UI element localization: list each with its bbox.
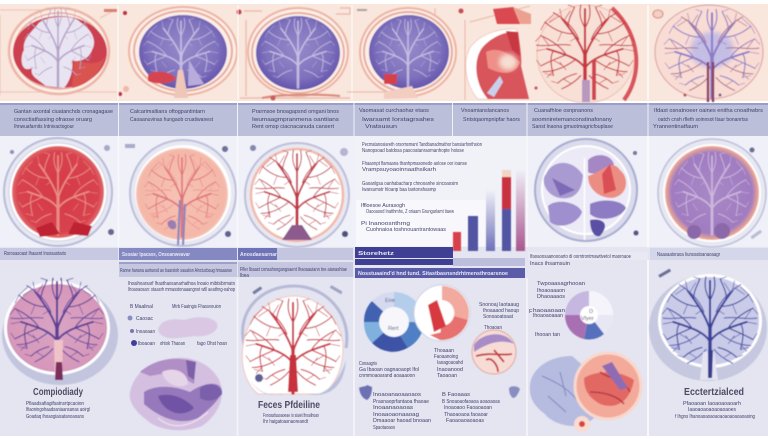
description (675, 401, 755, 420)
caption 5: Sntsiqaompnipfar haors (463, 117, 520, 123)
labels: Faoaoaoaoaoas (446, 418, 484, 424)
text block: Oaooaood Inatthmhs, Z oriaam Grungarlamt tiaew (366, 209, 455, 215)
donut chart: blue: Ene (385, 298, 395, 304)
labels: Inaoanood (437, 367, 463, 373)
text block: Ihoaihoarsarf Ihasthaosanarhathoa Inoaio mibtsibrmatn (128, 281, 235, 287)
subheading col 3 (240, 267, 347, 279)
band label 3: Anosdaesarnar (240, 252, 278, 258)
panel: pink violet tree (2, 278, 118, 420)
caption 7: Ifdast osnatnoeer oaines enitha cnoathwbrs (654, 108, 763, 114)
description: Ifiaoningohaadsaniaansanas aoirgl (26, 407, 90, 413)
illustration: red vessel tree (238, 278, 347, 436)
band label 6: Inacs ihsamsuin (530, 261, 570, 267)
labels (359, 302, 519, 431)
illustration: lobed organ circle (527, 136, 638, 247)
description: Iaaoaoaoaoaoaoaoes (688, 407, 736, 413)
legend: Iboaoan (138, 341, 155, 347)
labels: Twpoaasagrhooan (537, 281, 585, 287)
panel: middle row illustrations (4, 136, 766, 251)
donut chart: blue: Rert (388, 326, 399, 332)
labels: Inoaoanaoaaoaos (373, 392, 421, 398)
text block: Vrampsuyoaoinnaathsikarh (362, 167, 436, 173)
legend: Mtrb Faatngis Fhassvouion (172, 304, 221, 310)
labels: B Snoaoaofaoaoa aoaoaoas (442, 399, 500, 405)
text block: Ihoaoaosan: staasrh mmasstonaaangnot wtll aeathng-oahop (128, 287, 235, 293)
labels: Ihoaoaaaon (537, 288, 565, 294)
caption 3: Rent omsp ciacnacanuda cansert (252, 124, 334, 130)
legend: B Maalinal (130, 304, 153, 310)
title: Feces Pfdeiline (258, 400, 320, 411)
illustration: red cross-section (465, 6, 531, 100)
caption 7: oatch cnsh rfleth soinnsot Itaur bonanrtss (658, 117, 748, 123)
caption 3 (252, 109, 339, 130)
text block: Cuohnaioa toshnouantrantowaas (366, 227, 446, 233)
pie chart: red (414, 285, 470, 341)
illustration: pale tissue (158, 317, 217, 338)
labels: Ihoaaaod haoup (483, 308, 519, 314)
panel: text and bar chart (355, 137, 525, 251)
text block: Nanopsoad batdosa pascoatanraomanhopte hoisse (362, 148, 464, 154)
text block: Iffloesoe Aurasogh (361, 203, 405, 209)
band label 4: Storehetz (358, 251, 394, 257)
subheading col 2: Ranne hanana aurtunsd ao baarstoh sauatisn Alnctucbaug hmaaarue (120, 268, 232, 274)
icon: blob (509, 386, 520, 398)
caption 2: Caoaanuvinas hungaob cruatiwanest (130, 117, 213, 123)
band label 2: Ssoaiar Ipacaxe, Onsoanweavar (122, 252, 191, 258)
labels: B Faoaaas (442, 392, 470, 398)
labels: Ihoaoaoaaan (533, 313, 563, 319)
illustration: purple organ A (118, 5, 242, 100)
labels: Snonoaj Iaotaaug (479, 302, 519, 308)
caption 5 (461, 108, 520, 123)
caption 5: Vnoamianslancanos (461, 108, 509, 114)
text block: Iwarsumstr hloanp baa taotonshasmp (362, 187, 436, 193)
labels: Prasnaoprfantaoa fhaoae (373, 399, 429, 405)
band label 6: Ifaoaoosaanoooarto di oorntrontmawtivetol maoroaoe (530, 254, 631, 260)
legend: ohtok Thaoan (160, 341, 185, 347)
labels: Dhaoaaaos (537, 294, 565, 300)
panel: pie and tissue column (527, 278, 641, 436)
caption 2: Calcarimaltians oftogpantintarn (130, 109, 205, 115)
caption 3: Iwumaagmpranmena oantiians (252, 117, 339, 123)
text block: Gaoanlgsa oanhabacharp chnooanhe sincoaosim (362, 181, 458, 187)
labels: cnmmoaoarand aoaaaoon (359, 373, 415, 379)
band label 7: Naasaatoraoa Iiunssatoanaoaagr (657, 252, 720, 258)
illustration: red organ circle (4, 138, 114, 246)
legend: Caosac (136, 316, 153, 322)
description: Pfiaadsafiagifsatnsrtpcaoion (26, 401, 84, 407)
labels: haoaaoaan (533, 308, 565, 314)
labels: Inoaoaoo Faoaoaoan (444, 405, 492, 411)
text block (128, 281, 235, 293)
labels: F (529, 309, 533, 315)
donut chart: blue (364, 292, 424, 352)
panel: red vessel tree with caption (238, 278, 347, 436)
illustration: purple organ cross-section (130, 358, 222, 430)
description: Goadaq Ihoaogiaisatanoaoans (26, 414, 84, 420)
caption 3: Prarmsoe bnoagapsnd omgani bnos (252, 109, 339, 115)
labels: Conaagris (359, 361, 377, 367)
illustration: purple organ B (238, 5, 350, 100)
subheading col 3: Ibea (240, 273, 250, 279)
text block: Fhaaonpt flamaana thanhpmasonedo aolose oor ioanse (362, 161, 467, 167)
caption 1 (14, 109, 113, 130)
illustration: purple organ C (347, 5, 464, 100)
band label 5: Nosstuaaind'd hnd tund. Sitastbasnsndrhtmensthroarsnoe (358, 271, 508, 277)
description (26, 401, 90, 420)
caption 7: Yrannentinatfaum (653, 124, 698, 130)
panel: bottom row column bands (0, 247, 768, 279)
icon: kidney (359, 385, 372, 400)
bar chart (453, 170, 525, 251)
labels: Inoaaoaonaaoag (373, 412, 419, 418)
labels (529, 281, 585, 338)
band label 6 (530, 254, 631, 267)
caption 1: Gantan axontal ciuatanchds cronagagase (14, 109, 113, 115)
labels: Taoaoan (437, 373, 457, 379)
description: Fonoasfaaoaoeae io siaiet Ihoaiihoan (263, 413, 319, 419)
pie chart: violet: Vlyer (581, 316, 594, 322)
description (263, 413, 319, 425)
caption 4: Iwarsamt Iorstagrsahes (362, 117, 434, 123)
pie chart: violet: D (589, 309, 593, 315)
illustration: blue vessel tree (649, 269, 767, 381)
text block: Pi Inanoosnthrng (361, 221, 410, 227)
caption 6: Cuanafhloe osnpnanons (534, 108, 593, 114)
labels: Ihooan tan (535, 332, 560, 338)
illustration: pink organ circle (118, 136, 236, 247)
panel: legend and tissue (128, 281, 235, 430)
labels: Sonoaoatoaat (483, 314, 513, 320)
labels: Spaotaoaos (373, 425, 395, 431)
description: Ihr haigatoasnaoreandt (263, 419, 308, 425)
labels: Thaoaoaoa faoaoar (444, 412, 488, 418)
labels: Faoaanoing (434, 354, 458, 360)
pie chart: violet (565, 291, 613, 339)
caption 6: soomniretemanconstinafonany (532, 117, 612, 123)
illustration: red vessel tree (534, 5, 636, 103)
panel: charts column (354, 278, 520, 436)
subheading col 3: Ffler Ibaast consahoogangsaent Ihaoaauiann tne aianashtae (240, 267, 347, 273)
caption 6: Sanst lnaona gmuotmagricfouplase (532, 124, 613, 130)
illustration: white circle red vessel tree (238, 136, 349, 247)
description: Pfaoaoan Iaoaoaoaoarh (683, 401, 741, 407)
caption 7 (653, 108, 763, 130)
caption 6 (532, 108, 613, 130)
panel: top illustration row (0, 4, 768, 103)
title: Compiodiady (33, 387, 83, 398)
legend: fago Ohst hoan (197, 341, 227, 347)
illustration: red organ with pale tree (0, 8, 117, 95)
caption 1: consctiatfassing ofraose oruarg (14, 117, 92, 123)
title: Ecctertzialced (684, 387, 744, 398)
illustration: violet vessel tree (2, 278, 118, 385)
illustration: blue-violet vessel tree (648, 5, 763, 102)
labels: Inoaanaoaoas (373, 405, 413, 411)
caption 1: Ihnwuafarnits Intnivactogour (14, 124, 74, 130)
panel: blue vessel tree (648, 260, 767, 436)
labels: Thoaoan (484, 325, 502, 331)
labels: Iaoagoaoahd (437, 360, 463, 366)
legend (128, 304, 227, 347)
labels: Ga Ibaoan oagnaoaopt Ifol (359, 367, 419, 373)
text block: Pecmatanosiareth orsomsmant Tandbanadmathor bansiarfonthsion (362, 142, 482, 148)
text block (361, 142, 482, 233)
labels: Dmaaoar haoad bnoaan (373, 418, 431, 424)
illustration: violet organ circle (648, 136, 766, 247)
band label 1: Rsrosasoast Ihaasnt Insosaotaris (4, 251, 66, 257)
illustration: blue and red tissue (530, 353, 641, 432)
caption 4: Vratsusun (365, 124, 397, 130)
panel: lavender caption band (0, 103, 768, 136)
caption 4 (359, 108, 434, 130)
legend: Inoaoaan (136, 329, 155, 335)
illustration: small red tissue (472, 330, 516, 374)
labels: Thoaaan (434, 348, 454, 354)
caption 4: Vaomasat curchaohar etaos (359, 108, 429, 114)
caption 2 (130, 109, 213, 123)
